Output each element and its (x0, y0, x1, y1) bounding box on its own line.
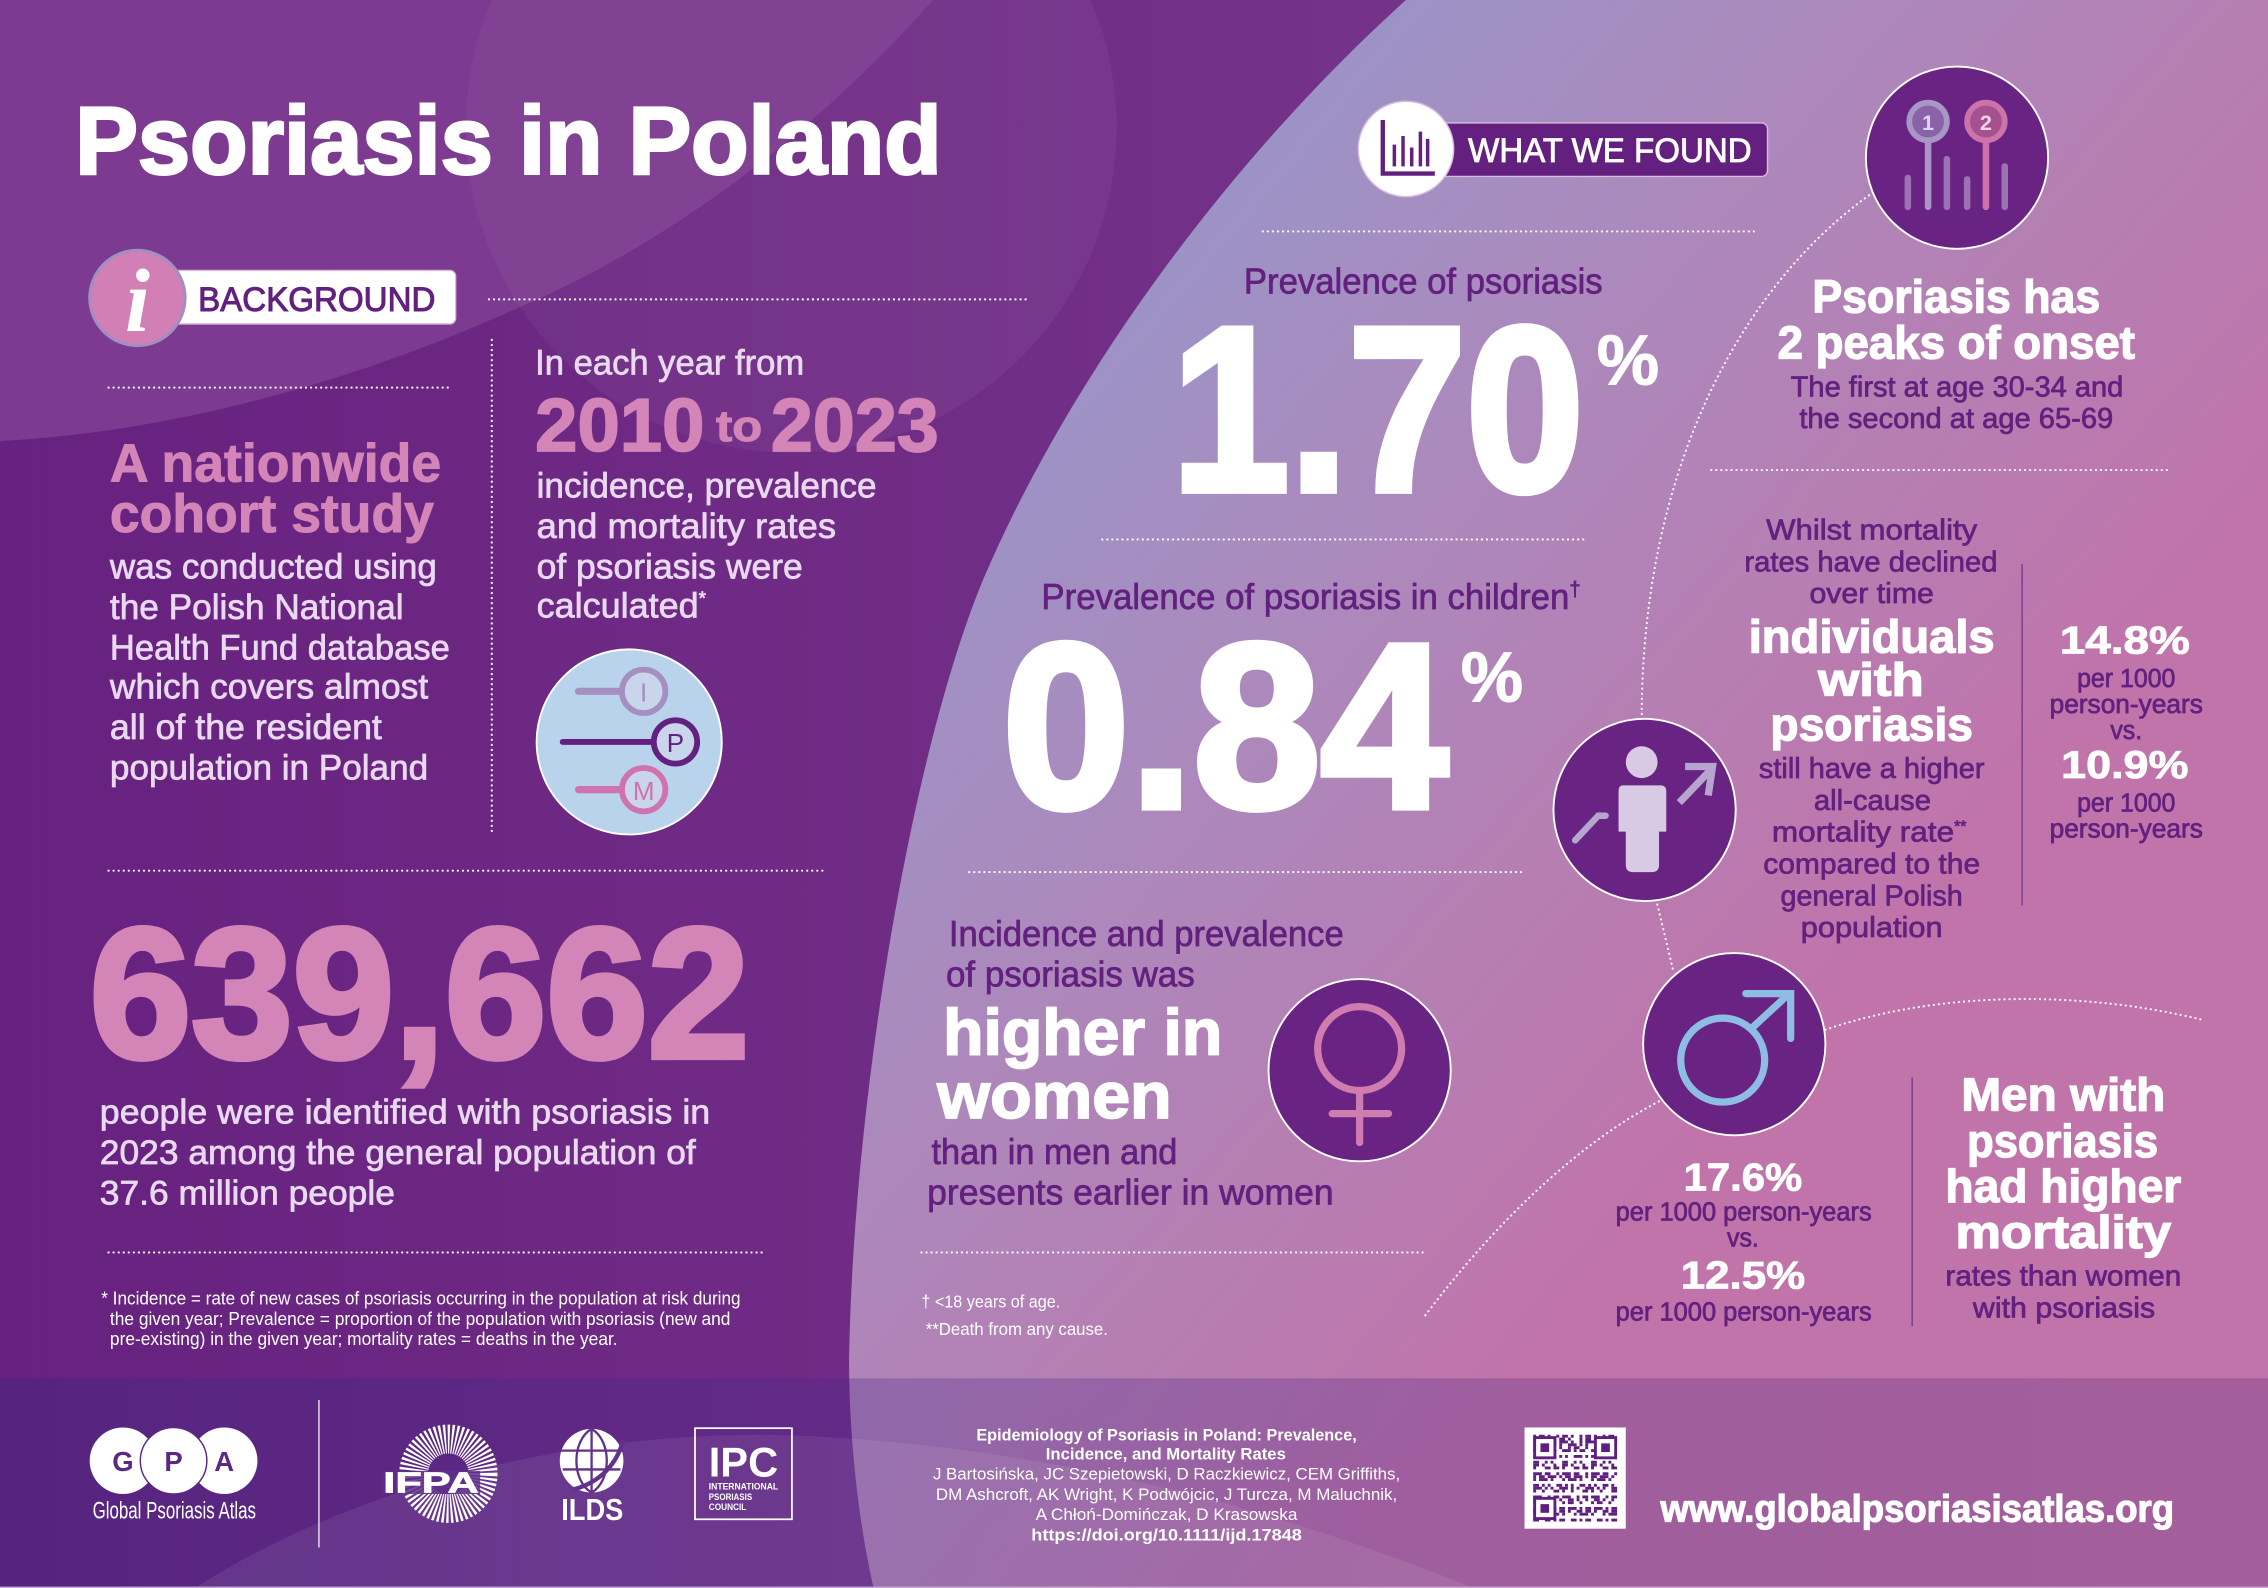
text: nationwide cohort study (109, 435, 450, 788)
text: nationwide cohort study: which covers almost (109, 667, 428, 707)
heading: background badge: BACKGROUND (198, 281, 435, 319)
text: men higher mortality: mortality (1956, 1206, 2171, 1258)
text: higher all-cause mortality (1744, 514, 1998, 944)
text: citation (933, 1425, 1400, 1544)
text: men higher mortality: psoriasis (1967, 1115, 2158, 1167)
icon: two peaks: 1 (1922, 110, 1934, 135)
logo: global psoriasis atlas: P (164, 1446, 183, 1477)
text: higher all-cause mortality: compared to the (1763, 849, 1980, 881)
text: higher in women: Incidence and prevalence (949, 913, 1344, 954)
text: higher in women: of psoriasis was (946, 953, 1195, 994)
heading: background badge (90, 250, 456, 351)
logo: IFPA: IFPA (383, 1468, 479, 1500)
text: higher all-cause mortality: rates have declined (1744, 546, 1998, 578)
text: nationwide cohort study: the Polish National (110, 587, 404, 627)
stat: overall mortality rates: per 1000 (2077, 663, 2175, 693)
stat: overall mortality rates: person-years (2050, 689, 2203, 719)
icon: incidence prevalence mortality: I (640, 677, 647, 707)
stat: overall mortality rates: person-years (2050, 813, 2203, 843)
stat: prevalence of psoriasis: Prevalence of psoriasis (1244, 261, 1603, 302)
stat: prevalence in children: % (1461, 638, 1523, 717)
text: nationwide cohort study: was conducted using (109, 547, 437, 587)
text: people identified (100, 1094, 710, 1213)
stat: male vs female mortality: vs. (1727, 1223, 1759, 1253)
text: people identified: people were identified with psoriasis in (100, 1094, 710, 1132)
text: 2010 to 2023: In each year from (535, 343, 804, 383)
logo: IPC: INTERNATIONAL (709, 1482, 779, 1492)
text: 2010 to 2023: and mortality rates (537, 506, 836, 546)
stat: prevalence in children: Prevalence of psoriasis in children (1041, 576, 1569, 617)
text: website url: www.globalpsoriasisatlas.org (1660, 1487, 2174, 1529)
text: two peaks of onset: Psoriasis has (1812, 270, 2100, 322)
text: men higher mortality (1945, 1069, 2181, 1325)
stat: male vs female mortality: 17.6% (1684, 1156, 1802, 1199)
text: citation: Epidemiology of Psoriasis in Poland: Prevalence, (976, 1425, 1357, 1444)
text: higher in women: presents earlier in women (927, 1172, 1334, 1213)
stat: overall mortality rates: per 1000 (2077, 787, 2175, 817)
logo: ILDS (560, 1429, 623, 1527)
stat: overall mortality rates: 14.8% (2060, 620, 2190, 663)
text: citation: Incidence, and Mortality Rates (1046, 1444, 1286, 1463)
icon: incidence prevalence mortality: M (633, 776, 654, 806)
stat: prevalence in children: 0.84 (1002, 595, 1448, 857)
logo: global psoriasis atlas: A (214, 1446, 234, 1477)
stat: prevalence in children: † (1569, 579, 1581, 601)
logo: ILDS: ILDS (561, 1494, 623, 1527)
text: 2010 to 2023: to (716, 403, 762, 451)
heading: what we found badge (1358, 101, 1768, 197)
icon: incidence prevalence mortality: P (667, 728, 684, 758)
text: citation: J Bartosińska, JC Szepietowski, D Raczkiewicz, CEM Griffiths, (933, 1465, 1400, 1484)
logo: global psoriasis atlas: Global Psoriasis Atlas (93, 1498, 256, 1525)
text: higher all-cause mortality: general Polish (1781, 880, 1963, 912)
logo: IPC: PSORIASIS (709, 1492, 752, 1502)
logo: global psoriasis atlas (90, 1427, 257, 1525)
icon: two peaks: 2 (1980, 110, 1992, 135)
text: higher all-cause mortality: with (1817, 654, 1924, 706)
stat: male vs female mortality: per 1000 person-years (1616, 1296, 1872, 1326)
text: nationwide cohort study: population in Poland (110, 748, 428, 788)
text: 2010 to 2023: incidence, prevalence (537, 466, 877, 506)
panel: background (90, 250, 1030, 1349)
text: nationwide cohort study: Health Fund database (110, 627, 450, 667)
icon: person with rising arrows (1553, 719, 1736, 901)
text: higher in women: than in men and (932, 1131, 1177, 1172)
footnote: definitions: * Incidence = rate of new cases of psoriasis occurring in the population at risk during (101, 1289, 741, 1309)
stat: male vs female mortality: per 1000 person-years (1616, 1197, 1872, 1227)
text: higher in women: higher in (943, 995, 1222, 1068)
stat: male vs female mortality (1616, 1156, 1872, 1326)
logo: IFPA (382, 1439, 483, 1508)
text: men higher mortality: had higher (1945, 1160, 2181, 1212)
text: two peaks of onset (1778, 270, 2135, 435)
footnote: definitions: the given year; Prevalence = proportion of the population with psoriasis (new and (110, 1309, 730, 1329)
text: 2010 to 2023: * (699, 588, 707, 609)
footnote: children and death: † <18 years of age. (921, 1291, 1060, 1311)
text: men higher mortality: Men with (1961, 1069, 2165, 1121)
text: higher in women: women (936, 1059, 1172, 1132)
text: nationwide cohort study: A nationwide (110, 435, 441, 494)
panel: footer (90, 1400, 2174, 1548)
text: higher all-cause mortality: still have a higher (1759, 753, 1985, 785)
logo: IPC: IPC (709, 1439, 778, 1486)
text: citation: DM Ashcroft, AK Wright, K Podwójcic, J Turcza, M Maluchnik, (936, 1485, 1397, 1504)
heading: background badge: i (125, 252, 150, 351)
heading: what we found badge: WHAT WE FOUND (1468, 132, 1752, 170)
footnote: definitions (101, 1289, 741, 1349)
icon: male symbol (1643, 953, 1825, 1135)
logo: global psoriasis atlas: G (112, 1446, 134, 1477)
text: two peaks of onset: The first at age 30-34 and (1791, 371, 2123, 403)
text: higher all-cause mortality: ** (1954, 819, 1967, 836)
text: 2010 to 2023: calculated (537, 586, 699, 626)
text: two peaks of onset: 2 peaks of onset (1778, 317, 2135, 369)
text: higher in women (927, 913, 1344, 1213)
text: 2010 to 2023 (535, 343, 939, 626)
stat: prevalence of psoriasis: 1.70 (1172, 278, 1584, 540)
panel: what we found (921, 67, 2203, 1339)
logo: IPC: COUNCIL (709, 1502, 747, 1512)
stat: prevalence of psoriasis: % (1597, 322, 1659, 401)
footnote: children and death (921, 1291, 1108, 1339)
text: citation: A Chłoń-Domińczak, D Krasowska (1036, 1505, 1298, 1524)
text: higher all-cause mortality: population (1801, 912, 1943, 944)
text: higher all-cause mortality: Whilst mortality (1766, 514, 1978, 546)
stat: male vs female mortality: 12.5% (1681, 1255, 1805, 1298)
text: higher all-cause mortality: over time (1809, 578, 1934, 610)
big number: 639,662: 639,662 (90, 890, 749, 1097)
text: men higher mortality: with psoriasis (1972, 1293, 2155, 1325)
footnote: definitions: pre-existing) in the given year; mortality rates = deaths in the year. (110, 1329, 618, 1349)
stat: overall mortality rates: vs. (2110, 715, 2142, 745)
text: citation: https://doi.org/10.1111/ijd.17848 (1031, 1525, 1302, 1544)
icon: female symbol (1269, 979, 1451, 1161)
text: higher all-cause mortality: mortality rate (1772, 817, 1954, 849)
text: higher all-cause mortality: individuals (1749, 610, 1995, 662)
text: 2010 to 2023: of psoriasis were (537, 547, 803, 587)
text: men higher mortality: rates than women (1945, 1261, 2181, 1293)
text: higher all-cause mortality: psoriasis (1770, 698, 1973, 750)
text: 2010 to 2023: 2010 (535, 383, 704, 467)
text: nationwide cohort study: cohort study (110, 485, 434, 544)
stat: overall mortality rates: 10.9% (2061, 744, 2188, 787)
text: people identified: 37.6 million people (100, 1175, 395, 1213)
text: higher all-cause mortality: all-cause (1814, 785, 1931, 817)
logo: IPC (695, 1428, 792, 1519)
icon: QR code (1525, 1427, 1626, 1529)
text: two peaks of onset: the second at age 65-69 (1799, 403, 2113, 435)
icon: two peaks (1866, 67, 2048, 249)
text: nationwide cohort study: all of the resident (110, 707, 382, 747)
text: 2010 to 2023: 2023 (771, 383, 939, 467)
icon: incidence prevalence mortality (537, 649, 722, 834)
text: people identified: 2023 among the general population of (100, 1134, 696, 1172)
title: Psoriasis in Poland (75, 89, 942, 195)
footnote: children and death: **Death from any cause. (926, 1319, 1108, 1339)
stat: overall mortality rates (2050, 620, 2203, 843)
